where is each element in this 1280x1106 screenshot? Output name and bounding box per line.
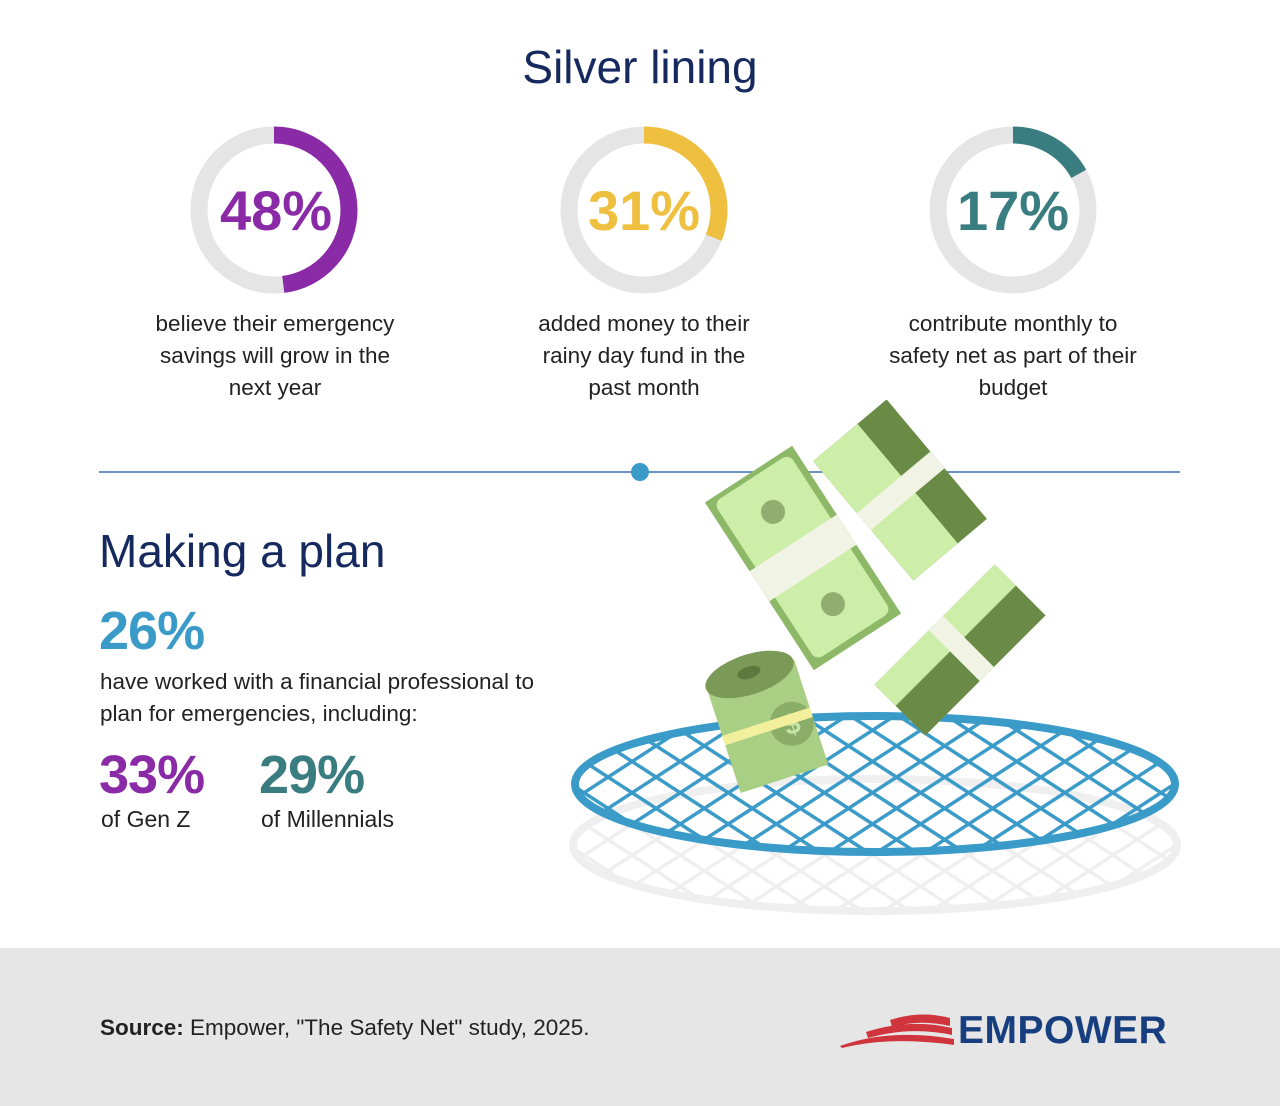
donut charts: [190, 126, 1096, 294]
logo: Empower: [840, 1009, 1167, 1052]
bill stack 3: [874, 564, 1046, 736]
stat Millennials: 29%: [259, 745, 364, 805]
donut: 31%: 31%: [588, 179, 700, 242]
divider with dot: [99, 463, 1180, 481]
footer: [0, 948, 1280, 1106]
bill stack 2: [813, 399, 987, 581]
stat Gen Z: 33%: [99, 745, 204, 805]
illustration: money falling into safety net: [569, 400, 1181, 915]
money roll: [700, 641, 828, 793]
donut: 17%: [938, 135, 1088, 285]
heading: Making a plan: Making a plan: [99, 525, 385, 577]
title: Silver lining: Silver lining: [522, 41, 758, 93]
stat Gen Z: of Gen Z: [101, 806, 190, 832]
caption 48%: believe their emergency savings will grow in the next year: [156, 311, 394, 400]
source text: Source: Empower, "The Safety Net" study, 2025.: [100, 1015, 590, 1040]
stat 26%: 26%: [99, 601, 204, 661]
donut: 48%: [199, 135, 349, 285]
caption 17%: contribute monthly to safety net as part of their budget: [889, 311, 1137, 400]
stat Gen Z: [99, 745, 204, 832]
stat Millennials: of Millennials: [261, 806, 394, 832]
donut: 31%: [569, 135, 719, 285]
donut: 17%: 17%: [957, 179, 1069, 242]
text: financial professional: have worked with a financial professional to plan for emergencies, including:: [100, 669, 534, 726]
net: [571, 712, 1179, 856]
bill stack 1: [705, 446, 901, 670]
caption 31%: added money to their rainy day fund in the past month: [538, 311, 750, 400]
net shadow: [569, 775, 1181, 915]
money roll: $: [780, 707, 805, 741]
donut: 48%: 48%: [220, 179, 332, 242]
stat Millennials: [259, 745, 394, 832]
logo: Empower: EMPOWER: [958, 1009, 1167, 1052]
